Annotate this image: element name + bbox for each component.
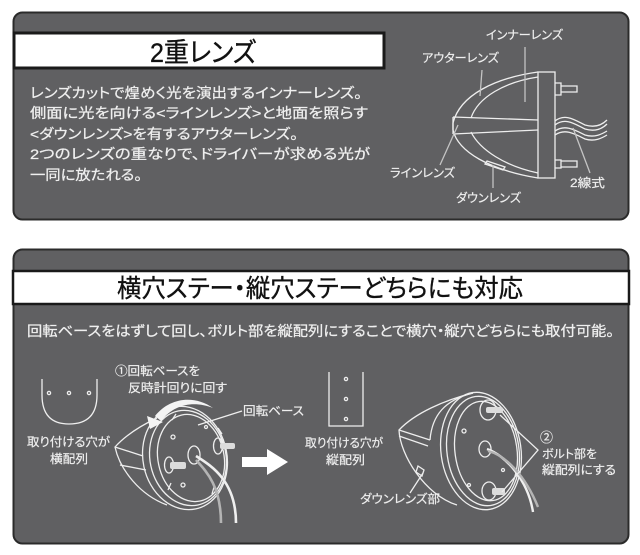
label: rotating base: 回転ベース	[243, 404, 304, 418]
panel: double lens	[14, 12, 628, 220]
label: two-wire	[570, 128, 605, 190]
heading: double lens	[14, 33, 384, 68]
label: step 1 rotate base: 反時計回りに回す	[128, 380, 228, 395]
label: rotating base	[198, 404, 304, 425]
diagram: vertical holes	[305, 372, 383, 467]
label: step 2 bolts vertical: 縦配列にする	[542, 463, 616, 477]
text block: lens description: 側面に光を向ける<ラインレンズ>と地面を照らす	[30, 105, 368, 121]
diagram: lens cross-section	[390, 27, 607, 205]
heading: stay compatibility	[13, 271, 629, 304]
illustration: lamp with horizontal bolts	[115, 398, 237, 523]
diagram: horizontal holes: 取り付ける穴が	[27, 434, 110, 449]
label: outer lens: アウターレンズ	[422, 50, 500, 65]
label: step 2 bolts vertical: ボルト部を	[542, 447, 597, 461]
heading: double lens: 2重レンズ	[150, 38, 256, 68]
illustration: lamp with vertical bolts	[399, 387, 538, 515]
text block: intro: 回転ベースをはずして回し、ボルト部を縦配列にすることで横穴・縦穴どちらにも取付可能。	[27, 323, 614, 339]
text block: lens description	[30, 85, 370, 183]
label: down lens part	[360, 466, 440, 506]
label: two-wire: 2線式	[570, 175, 605, 190]
label: step 1 rotate base	[115, 364, 228, 395]
panel: stay compatibility	[13, 250, 629, 544]
label: step 2 bolts vertical	[500, 415, 616, 492]
heading: stay compatibility: 横穴ステー・縦穴ステーどちらにも対応	[117, 275, 523, 303]
label: step 1 rotate base: ①回転ベースを	[115, 364, 200, 378]
arrow: transition	[242, 449, 288, 475]
diagram: horizontal holes: 横配列	[50, 452, 88, 466]
label: down lens part: ダウンレンズ部	[360, 491, 440, 506]
label: line lens: ラインレンズ	[390, 165, 456, 180]
text block: lens description: <ダウンレンズ>を有するアウターレンズ。	[30, 126, 298, 142]
text block: lens description: 2つのレンズの重なりで、ドライバーが求める光が	[30, 146, 370, 162]
label: step 2 bolts vertical: ②	[540, 430, 553, 445]
arrow: counter-clockwise rotation	[147, 400, 213, 429]
diagram: vertical holes: 取り付ける穴が	[305, 435, 383, 450]
label: line lens	[390, 125, 458, 180]
label: inner lens	[486, 27, 564, 102]
diagram: horizontal holes	[27, 379, 110, 466]
text block: lens description: 一同に放たれる。	[30, 167, 142, 183]
label: outer lens	[422, 50, 500, 96]
diagram: vertical holes: 縦配列	[326, 453, 365, 467]
label: inner lens: インナーレンズ	[486, 27, 564, 42]
text block: lens description: レンズカットで煌めく光を演出するインナーレンズ。	[30, 85, 362, 101]
label: down lens: ダウンレンズ	[456, 190, 522, 205]
label: down lens	[456, 165, 522, 205]
